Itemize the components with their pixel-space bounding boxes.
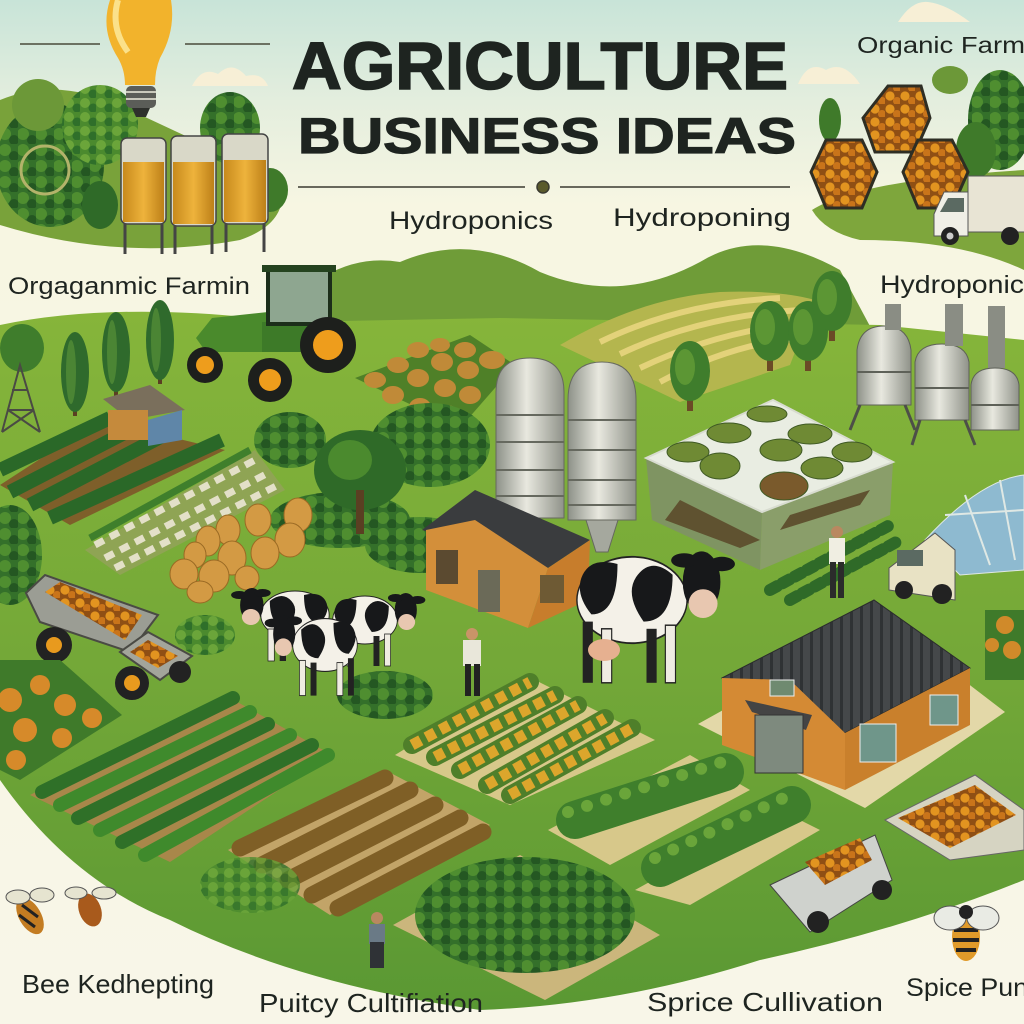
tall trees left — [0, 300, 174, 416]
small shed — [103, 385, 185, 446]
icon: windmill tower — [2, 365, 40, 432]
icon: three storage tanks — [121, 134, 268, 254]
central orchard trees — [254, 403, 490, 573]
label: spice right: Spice Pun — [906, 974, 1024, 1002]
icon: bee bottom right — [934, 905, 999, 961]
left edge bushes — [0, 505, 42, 605]
brown crop rows — [228, 770, 490, 915]
label: hydroponing: Hydroponing — [613, 204, 791, 232]
leafy bed bottom — [200, 855, 660, 1000]
crop rows green — [30, 695, 332, 862]
small barn centre — [422, 490, 590, 628]
cow large — [577, 551, 735, 683]
barn large — [698, 600, 1005, 808]
hills — [270, 245, 880, 350]
pile of eggs or squash — [170, 498, 312, 603]
title: BUSINESS IDEAS — [298, 108, 796, 164]
pumpkin patch left — [0, 660, 122, 780]
corn field — [395, 675, 655, 805]
industrial silos right — [850, 304, 1019, 445]
label: bee keeping: Bee Kedhepting — [22, 969, 214, 999]
potato field — [355, 335, 515, 428]
icon: light bulb — [106, 0, 172, 117]
striped hillside field — [560, 292, 815, 402]
trailer cart left — [26, 575, 192, 700]
bushes under herd — [175, 615, 433, 719]
panel: top-left tree vignette — [0, 79, 288, 248]
title: AGRICULTURE — [292, 29, 788, 104]
clouds — [192, 2, 970, 86]
label: spice cultivation: Sprice Cullivation — [647, 987, 883, 1017]
vegetable plots left — [0, 418, 285, 575]
shrub orchard — [548, 755, 820, 905]
label: poultry cultivation: Puitcy Cultifiation — [259, 988, 483, 1018]
icon: bee bottom left second — [65, 887, 116, 930]
icon: delivery truck top right — [934, 176, 1024, 245]
title divider — [298, 181, 790, 193]
farmer centre — [463, 628, 481, 696]
herd of cows — [231, 588, 425, 696]
background trees right — [670, 271, 852, 411]
greenhouse with crop trays — [646, 400, 893, 570]
worker bottom — [369, 912, 385, 968]
label: hydroponic right: Hydroponic — [880, 271, 1024, 299]
label: hydroponics: Hydroponics — [389, 207, 553, 235]
decorative lines beside bulb — [20, 43, 270, 45]
icon: bee bottom left — [6, 888, 54, 939]
shrub rows beside greenhouse — [770, 525, 900, 600]
panel: top-right honeycomb vignette — [811, 66, 1024, 270]
farmer right — [829, 526, 845, 598]
label: organic farm top right: Organic Farm — [857, 32, 1024, 58]
title — [292, 29, 796, 164]
delivery truck bottom right — [770, 835, 892, 933]
tray of spice — [885, 775, 1024, 860]
label: organic farming left: Orgaganmic Farmin — [8, 273, 250, 300]
farmland — [0, 312, 1024, 1010]
silos centre — [496, 358, 636, 552]
delivery van and greenhouse right — [889, 475, 1024, 604]
produce right — [985, 610, 1024, 680]
icon: green tractor — [187, 265, 356, 402]
